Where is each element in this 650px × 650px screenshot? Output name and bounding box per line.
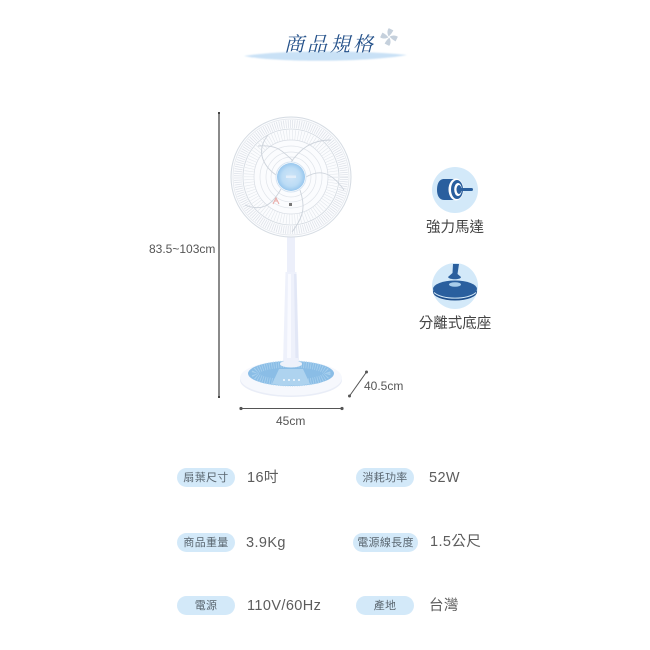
pole xyxy=(283,232,299,364)
height dimension label: 83.5~103cm xyxy=(149,242,215,256)
value: 110V/60Hz xyxy=(247,598,321,614)
label pill xyxy=(177,596,235,615)
label pill xyxy=(356,596,414,615)
icon: base xyxy=(432,263,478,309)
label pill: 電源 xyxy=(195,600,217,612)
spec: blade size xyxy=(177,468,279,487)
icon: motor xyxy=(432,167,478,213)
width arrow xyxy=(240,407,343,410)
width label: 45cm xyxy=(276,414,305,428)
spec: voltage xyxy=(177,596,321,615)
icon: pinwheel xyxy=(380,28,398,46)
label pill xyxy=(356,468,414,487)
title text: 商品規格 xyxy=(284,34,376,56)
value: 52W xyxy=(429,470,460,486)
title block xyxy=(245,28,406,62)
depth label: 40.5cm xyxy=(364,379,403,393)
feature: motor xyxy=(426,167,484,236)
label pill xyxy=(177,468,235,487)
label pill: 產地 xyxy=(374,600,396,612)
feature: detachable base xyxy=(419,263,491,332)
spec: weight xyxy=(177,533,286,552)
value: 台灣 xyxy=(429,598,459,614)
label pill xyxy=(177,533,235,552)
spec: cord length xyxy=(353,533,481,552)
fan blades xyxy=(245,135,344,232)
fan head xyxy=(231,117,351,237)
spec: power xyxy=(356,468,460,487)
fan base xyxy=(240,358,342,397)
value: 3.9Kg xyxy=(246,535,286,551)
depth arrow xyxy=(348,371,368,397)
value: 1.5公尺 xyxy=(430,534,481,550)
height dimension line xyxy=(218,112,220,398)
fan hub xyxy=(276,162,306,192)
label pill xyxy=(353,533,418,552)
caption: 分離式底座 xyxy=(419,316,491,332)
label pill: 扇葉尺寸 xyxy=(183,472,229,484)
fan logo mark xyxy=(273,198,292,206)
caption: 強力馬達 xyxy=(426,220,484,236)
value: 16吋 xyxy=(247,470,279,486)
label pill: 電源線長度 xyxy=(357,537,414,549)
spec: origin xyxy=(356,596,459,615)
title underline brush xyxy=(245,50,406,62)
label pill: 商品重量 xyxy=(183,537,229,549)
label pill: 消耗功率 xyxy=(362,472,408,484)
